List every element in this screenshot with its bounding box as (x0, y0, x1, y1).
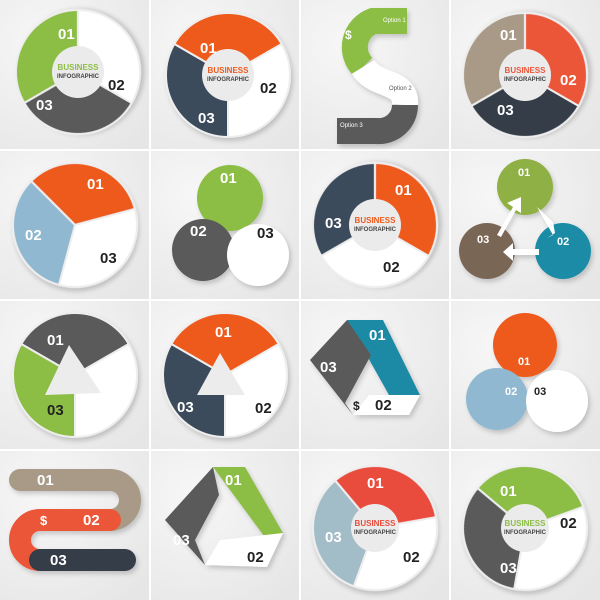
cell r3c1: gray/green/white ring: 03 (47, 402, 64, 419)
cell r4c3: red/blue/white swirl (296, 449, 454, 600)
cell r3c3: triangle teal/gray/white: 01 (369, 327, 386, 344)
cell r4c3: red/blue/white swirl: 01 (367, 475, 384, 492)
cell r2c4: three circles with arrows: 01 (518, 167, 530, 179)
cell r3c2: rounded triangle: 03 (177, 399, 194, 416)
cell r4c4: green/gray/white: 01 (500, 483, 517, 500)
cell r4c3: red/blue/white swirl: BUSINESS (355, 519, 396, 528)
cell r4c4: green/gray/white: BUSINESS (505, 519, 546, 528)
cell r4c3: red/blue/white swirl: INFOGRAPHIC (354, 530, 397, 536)
cell r3c1: gray/green/white ring: 02 (109, 359, 126, 376)
cell r3c2: rounded triangle: 02 (255, 400, 272, 417)
cell r3c3: triangle teal/gray/white: 03 (320, 359, 337, 376)
cell r1c3: S shape (337, 18, 412, 131)
cell r3c1: gray/green/white ring: 01 (47, 332, 64, 349)
cell r1c2: orange/white/navy triangle: 03 (198, 110, 215, 127)
cell r2c1: orange/blue/white swirl: 03 (100, 250, 117, 267)
cell r3c2: rounded triangle: 01 (215, 324, 232, 341)
cell r4c1: S stripes: $ (40, 513, 48, 528)
cell r2c2: three circles (172, 165, 289, 286)
cell r1c4: puzzle circle (440, 0, 600, 160)
cell r1c1: green/white/gray cycle: 02 (108, 77, 125, 94)
cell r3c4: three circles orange/blue/white: 03 (534, 386, 546, 398)
cell r2c3: navy/orange/white: 02 (383, 259, 400, 276)
cell r1c4: puzzle circle: 02 (560, 72, 577, 89)
cell r2c2: three circles: 02 (190, 223, 207, 240)
cell r3c1: gray/green/white ring (13, 313, 137, 437)
cell r4c2: hexagon green/gray/white (165, 467, 283, 567)
cell r2c3: navy/orange/white: 03 (325, 215, 342, 232)
cell r1c4: puzzle circle: INFOGRAPHIC (504, 77, 547, 83)
cell r1c1: green/white/gray cycle: 01 (58, 26, 75, 43)
cell r4c4: green/gray/white (453, 456, 597, 600)
cell r2c3: navy/orange/white: 01 (395, 182, 412, 199)
cell r2c1: orange/blue/white swirl: $ (75, 242, 83, 258)
cell r1c1: green/white/gray cycle (0, 0, 163, 157)
cell r4c1: S stripes: 02 (83, 512, 100, 529)
cell r3c4: three circles orange/blue/white: 01 (518, 356, 530, 368)
cell r3c2: rounded triangle (163, 313, 287, 437)
cell r1c2: orange/white/navy triangle: 01 (200, 40, 217, 57)
cell r2c3: navy/orange/white: BUSINESS (355, 216, 396, 225)
cell r2c1: orange/blue/white swirl: 01 (87, 176, 104, 193)
cell r1c2: orange/white/navy triangle: 02 (260, 80, 277, 97)
cell r4c2: hexagon green/gray/white: 03 (173, 532, 190, 549)
cell r3c3: triangle teal/gray/white (310, 320, 420, 415)
cell r2c4: three circles with arrows: 03 (477, 234, 489, 246)
cell r1c1: green/white/gray cycle: INFOGRAPHIC (57, 74, 100, 80)
cell r3c4: three circles orange/blue/white (466, 313, 588, 432)
cell r4c2: hexagon green/gray/white: 01 (225, 472, 242, 489)
cell r4c1: S stripes (20, 472, 130, 569)
cell r2c1: orange/blue/white swirl: 02 (25, 227, 42, 244)
cell r3c4: three circles orange/blue/white: 02 (505, 386, 517, 398)
cell r3c3: triangle teal/gray/white: 02 (375, 397, 392, 414)
cell r1c1: green/white/gray cycle: BUSINESS (58, 63, 99, 72)
cell r4c4: green/gray/white: 03 (500, 560, 517, 577)
cell r4c3: red/blue/white swirl: 02 (403, 549, 420, 566)
cell r4c4: green/gray/white: 02 (560, 515, 577, 532)
cell r3c3: triangle teal/gray/white: $ (353, 399, 360, 413)
cell r1c4: puzzle circle: 01 (500, 27, 517, 44)
cell r2c2: three circles: 03 (257, 225, 274, 242)
cell r1c2: orange/white/navy triangle: BUSINESS (208, 66, 249, 75)
cell r1c3: S shape: $ (345, 28, 352, 42)
cell r1c3: S shape: Option 2 (389, 86, 412, 92)
cell r1c4: puzzle circle: BUSINESS (505, 66, 546, 75)
cell r1c3: S shape: Option 1 (383, 18, 406, 24)
cell r4c1: S stripes: 01 (37, 472, 54, 489)
cell r1c4: puzzle circle: 03 (497, 102, 514, 119)
cell r1c1: green/white/gray cycle: 03 (36, 97, 53, 114)
cell r2c3: navy/orange/white (290, 140, 460, 310)
cell r2c2: three circles: 01 (220, 170, 237, 187)
cell r2c1: orange/blue/white swirl (0, 149, 151, 301)
cell r1c3: S shape: Option 3 (340, 123, 363, 129)
cell r2c4: three circles with arrows: 02 (557, 236, 569, 248)
cell r4c1: S stripes: 03 (50, 552, 67, 569)
cell r1c2: orange/white/navy triangle (166, 13, 290, 137)
cell r2c3: navy/orange/white: INFOGRAPHIC (354, 227, 397, 233)
cell r4c2: hexagon green/gray/white: 02 (247, 549, 264, 566)
cell r4c4: green/gray/white: INFOGRAPHIC (504, 530, 547, 536)
cell r4c3: red/blue/white swirl: 03 (325, 529, 342, 546)
cell r2c4: three circles with arrows (459, 159, 591, 279)
cell r1c2: orange/white/navy triangle: INFOGRAPHIC (207, 77, 250, 83)
